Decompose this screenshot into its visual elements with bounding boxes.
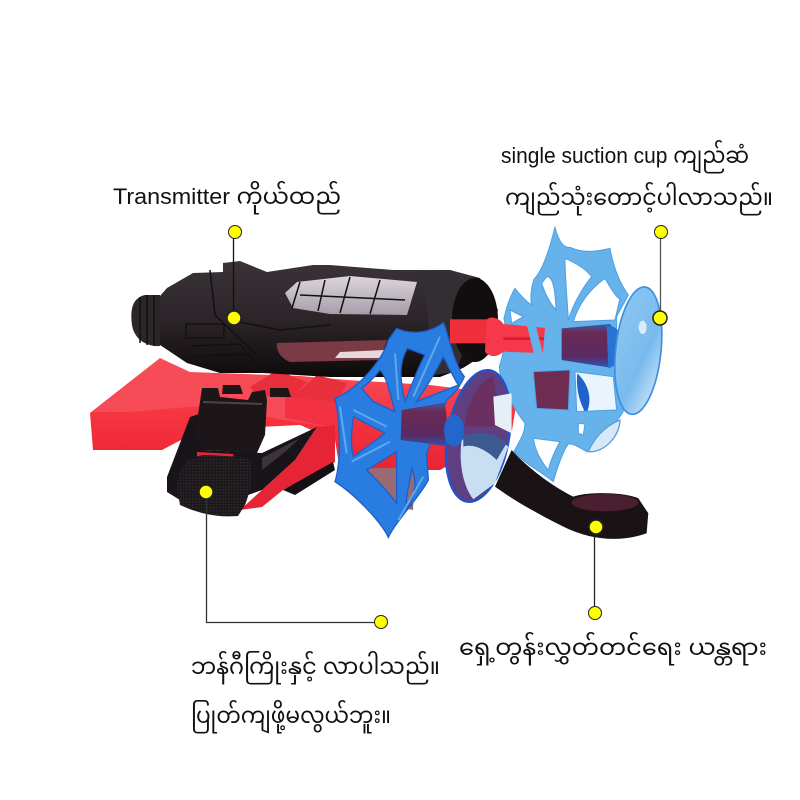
black launch arm <box>495 450 648 539</box>
marker: transmitter top <box>228 226 242 238</box>
silver plate <box>285 276 417 315</box>
red sliver <box>197 452 234 458</box>
cup white patch <box>493 393 512 433</box>
small rear cup <box>588 420 620 452</box>
front web <box>335 323 464 537</box>
label: suction cup line 2: ကျည်သုံးတောင့်ပါလာသည်။ <box>505 182 773 216</box>
barrel opening <box>452 278 498 362</box>
front cylinder <box>401 403 450 447</box>
leader line: suction cup <box>660 232 662 318</box>
marker: strap <box>199 485 213 499</box>
black barrel body <box>160 261 498 377</box>
arm button <box>572 494 638 511</box>
clip highlight <box>203 402 262 404</box>
panel detail lines <box>186 270 405 372</box>
back suction dart <box>450 227 668 482</box>
red ridges <box>250 370 347 402</box>
cup blue streak <box>463 433 507 460</box>
black clip <box>198 385 291 453</box>
label: launch mechanism: ရှေ့တွန်းလွှတ်တင်ရေး ယန္တရား <box>459 632 767 665</box>
window behind web <box>573 370 618 413</box>
back cup neck <box>607 326 622 368</box>
black glossy brace <box>167 412 317 510</box>
cup stem <box>444 415 464 447</box>
cup lower highlight <box>461 437 508 499</box>
lower shadow <box>283 462 335 495</box>
leader line: transmitter <box>232 232 234 318</box>
marker: launch end <box>588 606 602 620</box>
leader line: launch mechanism <box>594 527 596 613</box>
marker: suction top <box>654 226 668 238</box>
gloss highlight <box>262 438 300 470</box>
product photo: web shooter toy <box>90 227 668 539</box>
web highlights <box>340 337 440 520</box>
inner maroon section <box>530 370 572 412</box>
knob ridges <box>140 295 154 346</box>
lower red rod <box>130 387 337 428</box>
label: strap line 2: ပြုတ်ကျဖို့မလွယ်ဘူး။ <box>191 700 391 734</box>
marker: launch arm <box>589 520 603 534</box>
arm strap and wrist brace <box>167 385 335 516</box>
leader line: bungee strap <box>206 492 381 622</box>
back web <box>499 227 628 482</box>
barrel front rim <box>415 270 466 377</box>
front suction cup <box>437 365 520 507</box>
marker: suction cup <box>653 311 667 325</box>
red brace <box>240 425 335 510</box>
maroon lower plate <box>277 340 387 362</box>
marker: transmitter body <box>227 311 241 325</box>
red base plate <box>90 358 517 470</box>
cup upper shade <box>465 377 500 427</box>
back suction cup <box>609 285 668 417</box>
label: strap line 1: ဘန်ဂီကြိုးနှင့် လာပါသည်။ <box>191 651 440 684</box>
base plate top face <box>92 360 300 412</box>
marker: strap end <box>374 616 388 628</box>
upper red rod <box>450 318 550 356</box>
base plate shadow <box>365 468 415 510</box>
rear knob <box>131 295 160 346</box>
front suction dart <box>335 323 648 539</box>
dark blue fragment <box>577 373 589 414</box>
back web strand over rod <box>530 320 550 360</box>
back cylinder <box>562 324 615 367</box>
label: transmitter: Transmitter ကိုယ်ထည် <box>113 181 341 214</box>
back cup spot <box>639 321 647 334</box>
plate highlight <box>335 350 384 358</box>
fabric strap <box>177 455 252 516</box>
label: suction cup line 1: single suction cup ကျည်ဆံ <box>501 140 749 174</box>
